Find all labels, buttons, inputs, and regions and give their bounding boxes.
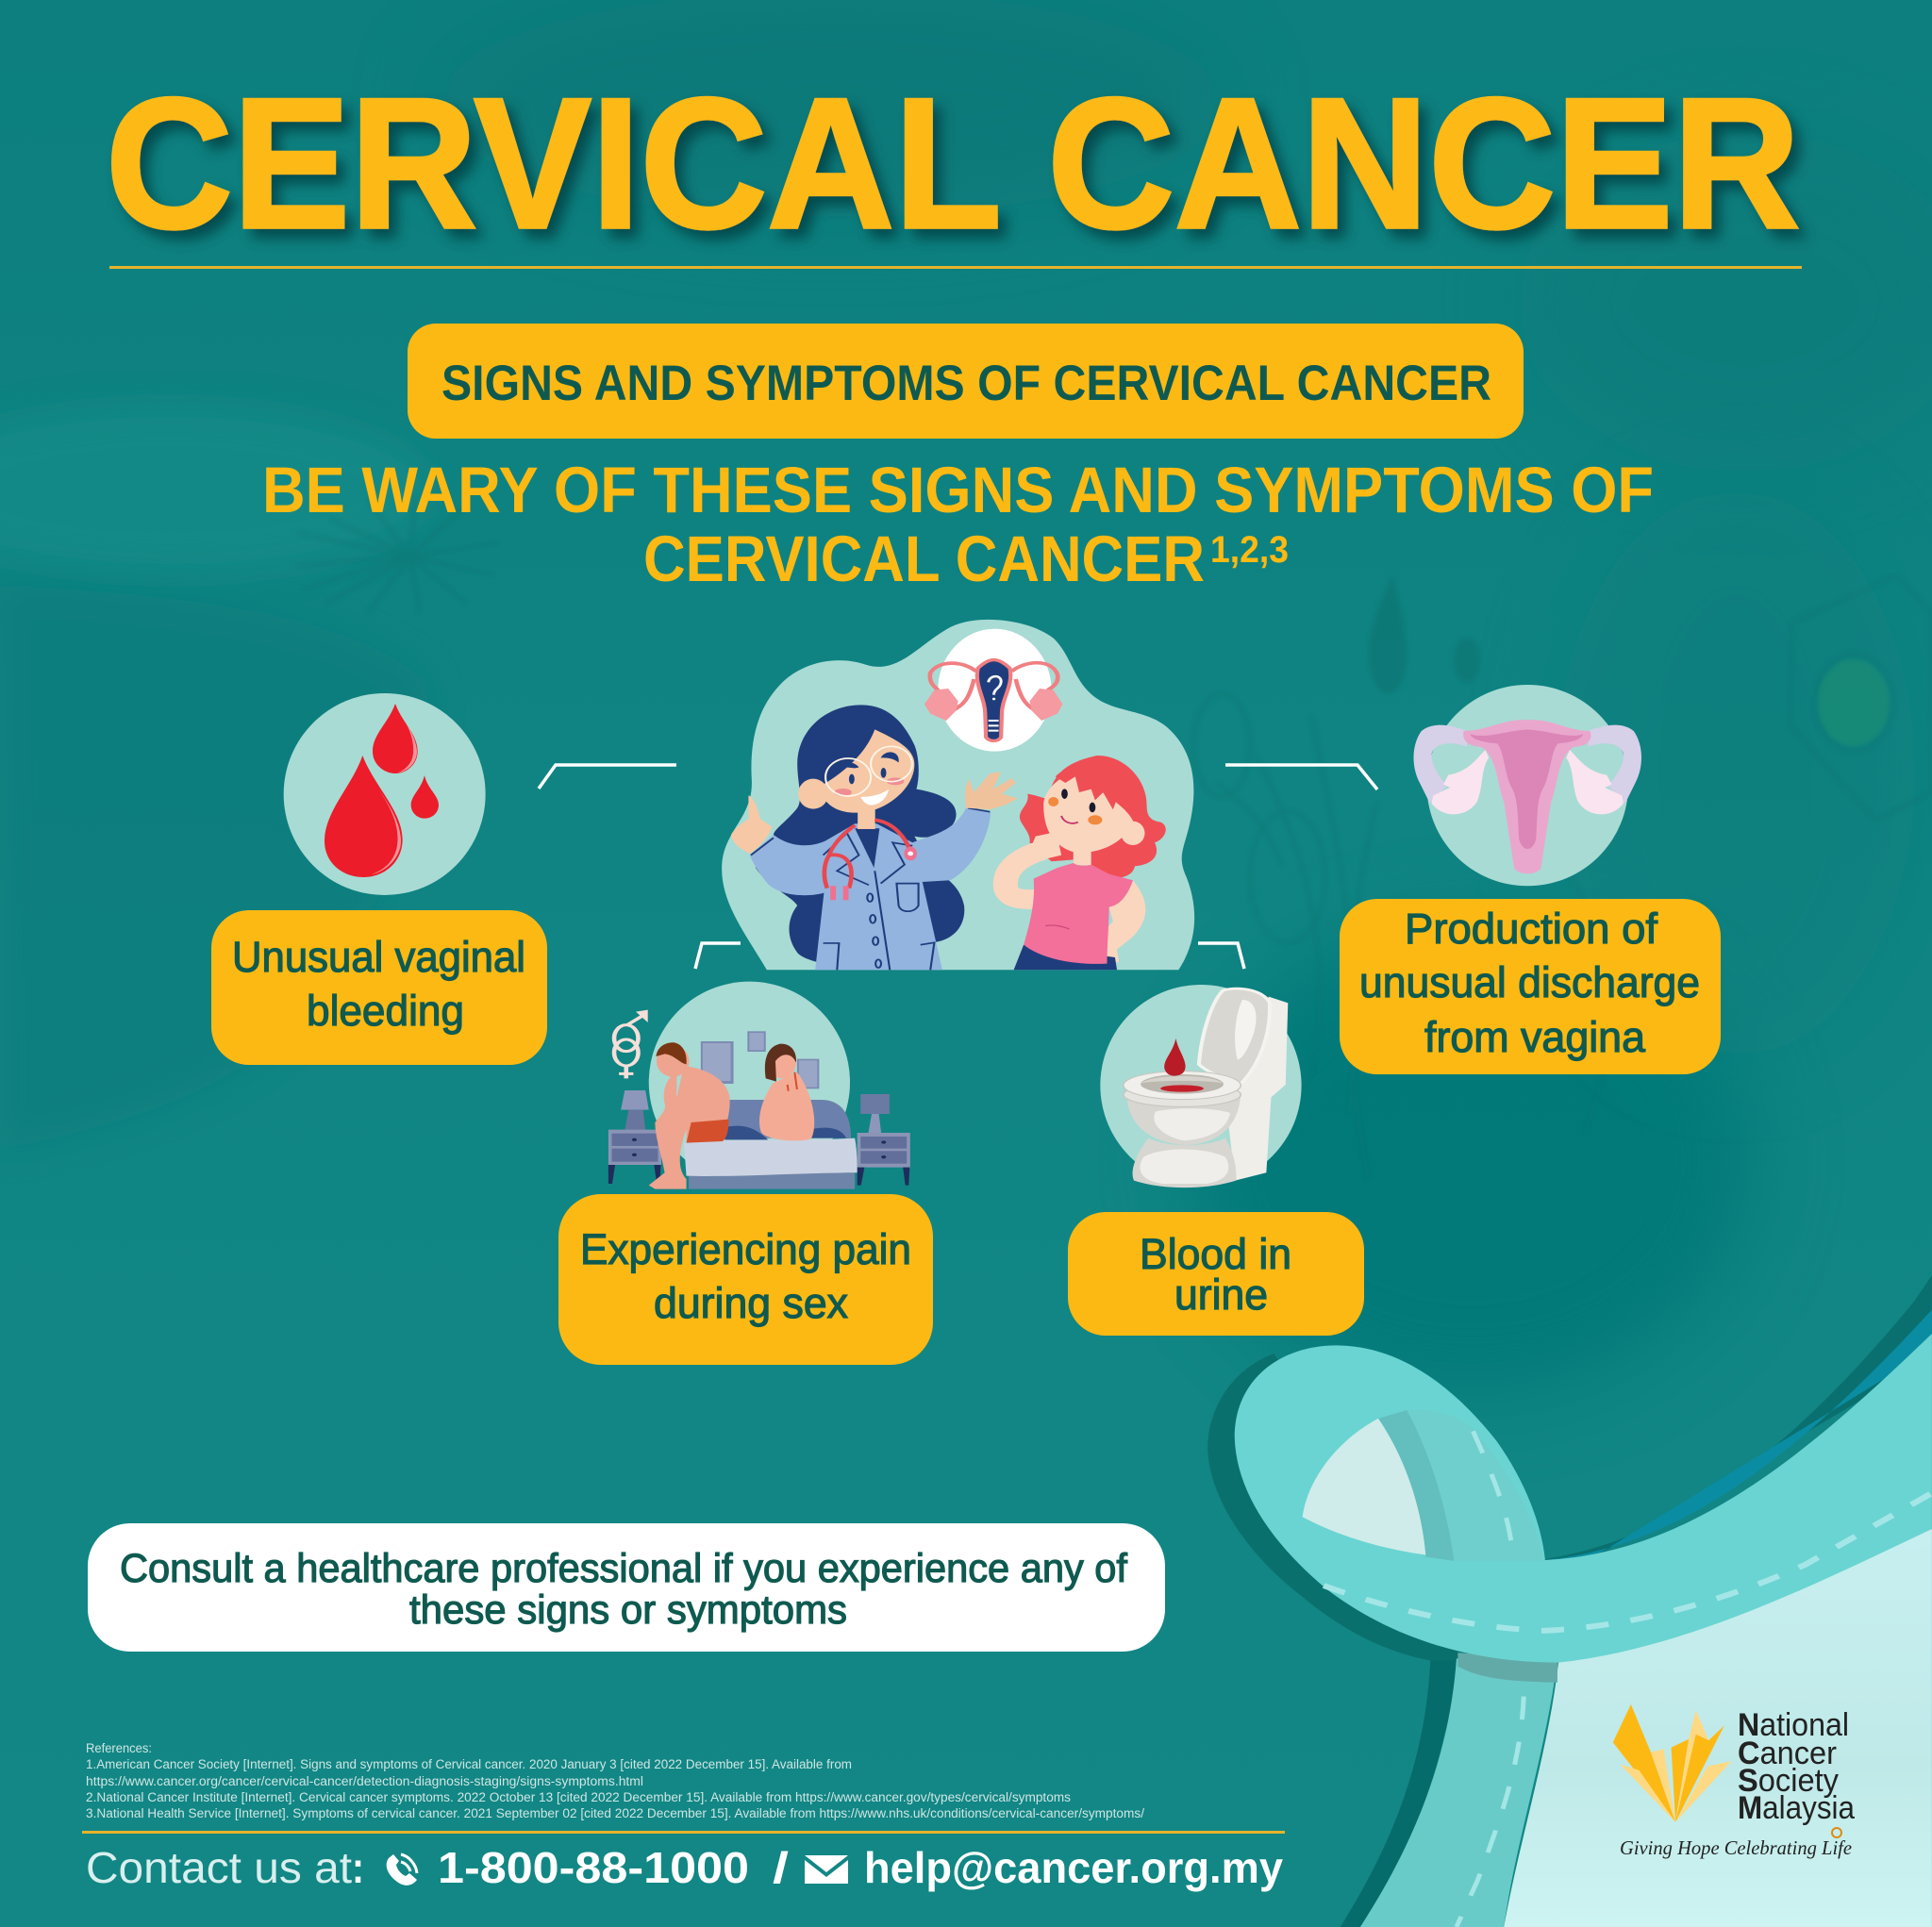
references	[86, 1741, 1144, 1820]
callout: consult a healthcare professional: Consult a healthcare professional if you experience any of	[120, 1546, 1128, 1591]
references: 1.American Cancer Society [Internet]. Signs and symptoms of Cervical cancer. 2020 January 3 [cited 2022 December 15]. Available from	[86, 1757, 852, 1771]
thought bubble	[924, 629, 1062, 752]
logo: National Cancer Society Malaysia	[1613, 1704, 1855, 1859]
icon: couple on bed	[608, 982, 910, 1189]
heading: 1,2,3	[1210, 529, 1289, 571]
contact line: :	[352, 1843, 364, 1892]
callout: consult a healthcare professional	[88, 1523, 1165, 1652]
logo: National Cancer Society Malaysia: Cancer	[1738, 1736, 1837, 1771]
connectors	[539, 765, 1377, 969]
label: production of unusual discharge	[1340, 899, 1721, 1074]
references: 3.National Health Service [Internet]. Symptoms of cervical cancer. 2021 September 02 [cited 2022 December 15]. Available from https://www.nhs.uk/conditions/cervical-cancer/symptoms/	[86, 1806, 1144, 1820]
label: production of unusual discharge: Production of	[1405, 905, 1657, 953]
references: References:	[86, 1741, 152, 1755]
logo: National Cancer Society Malaysia: Giving Hope Celebrating Life	[1620, 1836, 1852, 1859]
contact divider	[82, 1831, 1285, 1834]
logo mark	[1613, 1704, 1731, 1822]
contact line: Contact us at	[86, 1843, 352, 1892]
icon: envelope	[805, 1855, 848, 1884]
label: experiencing pain during sex	[558, 1194, 933, 1365]
label: blood in urine: urine	[1174, 1271, 1268, 1319]
contact line: /	[773, 1843, 789, 1892]
woman	[759, 1044, 814, 1140]
heading	[262, 454, 1654, 595]
label: experiencing pain during sex: Experiencing pain	[580, 1225, 911, 1273]
label: unusual vaginal bleeding: Unusual vaginal	[232, 933, 525, 981]
logo: National Cancer Society Malaysia: Society	[1738, 1763, 1839, 1799]
icon: blood drops	[284, 693, 486, 895]
icon: phone	[387, 1854, 417, 1885]
label: production of unusual discharge: from vagina	[1424, 1013, 1646, 1061]
label: unusual vaginal bleeding: bleeding	[307, 987, 464, 1035]
logo: National Cancer Society Malaysia: Malaysia	[1738, 1790, 1855, 1826]
callout: consult a healthcare professional: these signs or symptoms	[409, 1587, 847, 1633]
logo: National Cancer Society Malaysia: National	[1738, 1707, 1849, 1743]
icon: toilet with blood	[1100, 985, 1302, 1188]
contact line: help@cancer.org.my	[864, 1843, 1283, 1892]
contact line: 1-800-88-1000	[438, 1843, 749, 1892]
title underline	[109, 266, 1802, 269]
label: experiencing pain during sex: during sex	[654, 1279, 848, 1327]
ribbon decoration	[1208, 1275, 1932, 1927]
subtitle pill	[408, 324, 1524, 439]
central illustration: doctor and girl	[722, 620, 1194, 970]
title: CERVICAL CANCER	[106, 59, 1800, 267]
subtitle pill: SIGNS AND SYMPTOMS OF CERVICAL CANCER	[441, 356, 1491, 411]
references: 2.National Cancer Institute [Internet]. Cervical cancer symptoms. 2022 October 13 [cited 2022 December 15]. Available from https://www.cancer.gov/types/cervical/symptoms	[86, 1790, 1071, 1804]
label: blood in urine: Blood in	[1140, 1230, 1291, 1278]
label: blood in urine	[1068, 1212, 1364, 1336]
references: https://www.cancer.org/cancer/cervical-cancer/detection-diagnosis-staging/signs-symptoms.html	[86, 1774, 643, 1788]
heading: BE WARY OF THESE SIGNS AND SYMPTOMS OF	[262, 454, 1654, 526]
contact line	[86, 1843, 1283, 1892]
label: unusual vaginal bleeding	[211, 910, 547, 1065]
heading: CERVICAL CANCER	[643, 523, 1205, 595]
man	[649, 1042, 730, 1189]
girl	[1006, 756, 1166, 970]
label: production of unusual discharge: unusual discharge	[1359, 958, 1700, 1006]
icon: uterus	[1413, 685, 1641, 886]
doctor	[731, 705, 1018, 970]
